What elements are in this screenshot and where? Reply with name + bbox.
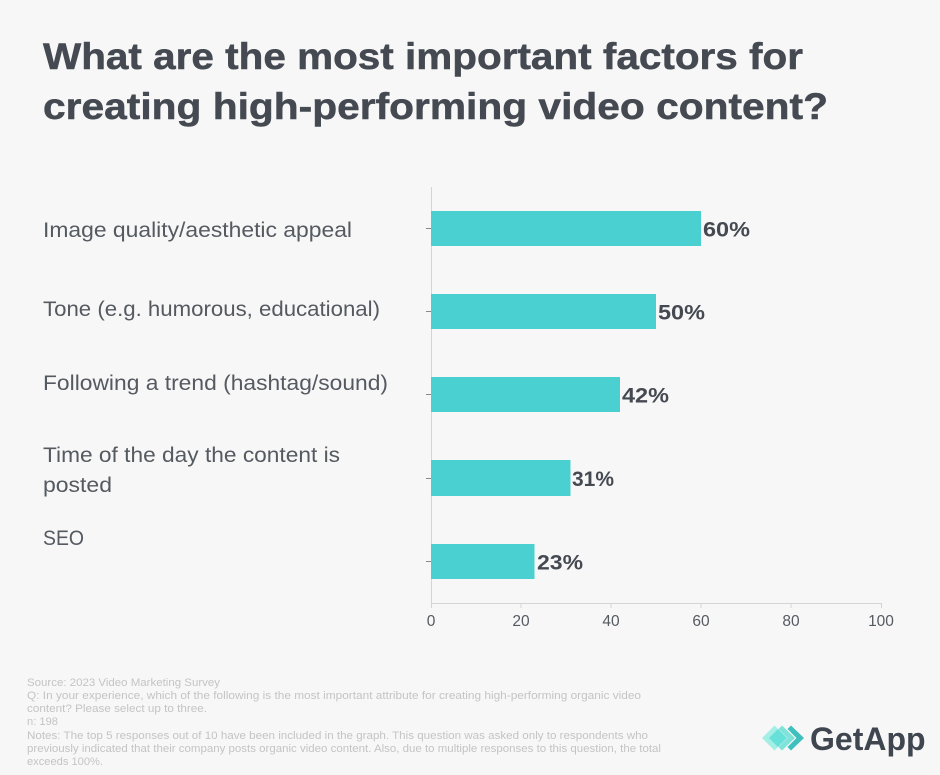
wordmark: GetApp <box>810 721 926 757</box>
category labels: Following a trend (hashtag/sound) <box>43 372 388 395</box>
source notes: content? Please select up to three. <box>27 703 207 715</box>
source notes: previously indicated that their company posts organic video content. Also, due to multiple responses to this question, the total <box>27 743 661 755</box>
title: What are the most important factors for <box>43 36 803 77</box>
logo: GetApp <box>762 721 926 757</box>
axis tick labels: 0 <box>427 613 436 630</box>
value labels: 31% <box>572 468 614 491</box>
category labels: SEO <box>43 527 84 550</box>
source notes: Source: 2023 Video Marketing Survey <box>27 677 221 689</box>
source notes: Notes: The top 5 responses out of 10 have been included in the graph. This question was asked only to respondents who <box>27 730 648 742</box>
category labels: posted <box>43 474 112 497</box>
axis tick labels: 100 <box>868 613 894 630</box>
axis tick labels: 80 <box>782 613 800 630</box>
value labels: 42% <box>622 384 669 408</box>
axis tick labels <box>427 613 894 630</box>
source notes: Q: In your experience, which of the following is the most important attribute for creating high-performing organic video <box>27 690 641 702</box>
source notes <box>27 677 661 768</box>
axis tick labels: 20 <box>512 613 530 630</box>
category labels: Tone (e.g. humorous, educational) <box>43 298 380 321</box>
category labels: Time of the day the content is <box>43 444 340 467</box>
icon: logo chevrons <box>762 726 804 750</box>
value labels: 23% <box>537 552 583 574</box>
chart axes <box>426 187 882 608</box>
value labels <box>537 218 750 574</box>
value labels: 50% <box>658 302 705 324</box>
category labels <box>43 219 388 550</box>
title: creating high-performing video content? <box>43 86 828 127</box>
value labels: 60% <box>703 218 750 242</box>
category labels: Image quality/aesthetic appeal <box>43 219 352 242</box>
axis tick labels: 60 <box>692 613 710 630</box>
bar chart <box>426 187 894 630</box>
source notes: n: 198 <box>27 716 58 728</box>
title <box>43 36 828 127</box>
source notes: exceeds 100%. <box>27 756 103 768</box>
axis tick labels: 40 <box>602 613 620 630</box>
bars <box>431 211 701 579</box>
